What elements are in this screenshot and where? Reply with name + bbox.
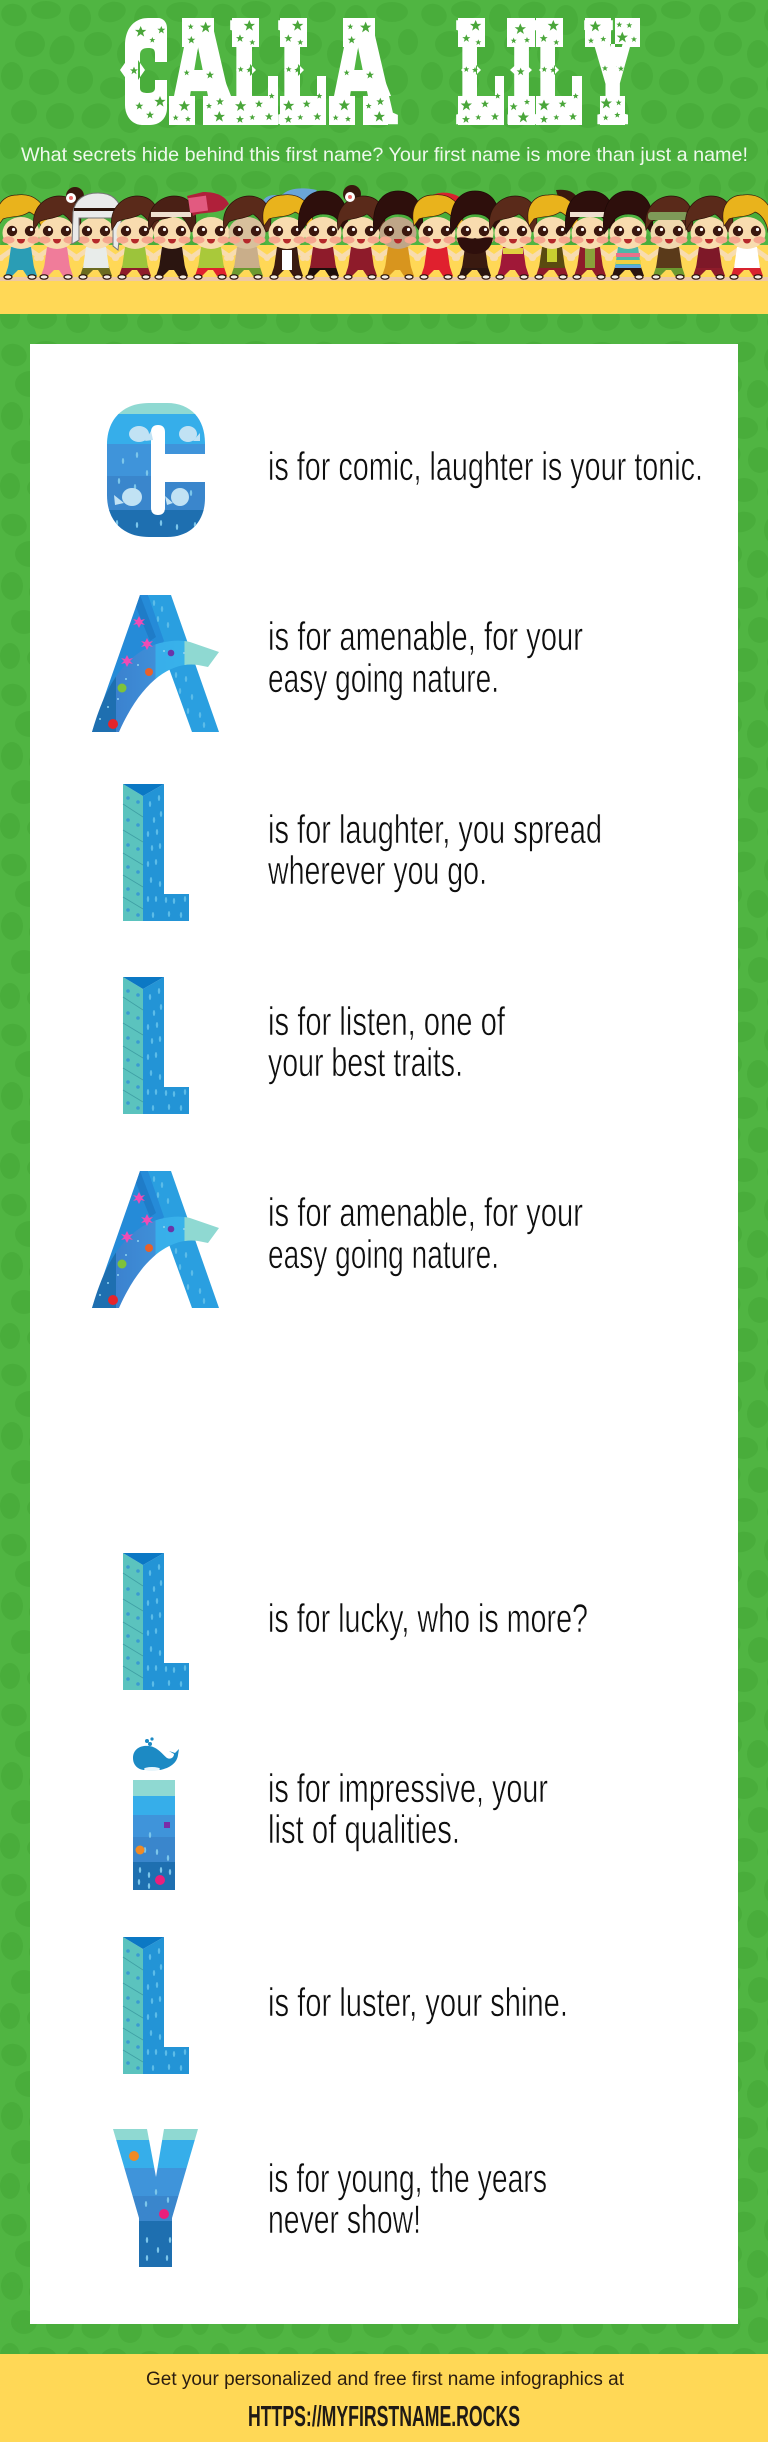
child 6: red fez, red skirt [187, 192, 234, 279]
text: is for amenable: easy going nature. [268, 1233, 499, 1277]
child 20: blond, red and white outfit [723, 195, 768, 279]
title letters: CALLA [120, 0, 397, 156]
title letters: LILY [456, 0, 640, 156]
icon: letter A [92, 595, 219, 732]
icon: letter L [123, 1937, 189, 2074]
child 8: blond, blue cap, apron [263, 188, 317, 279]
text: is for young [268, 2157, 547, 2242]
child 11: dark skin, ochre clothes [373, 191, 423, 279]
child 9: tall dark hair, maroon tunic [298, 191, 348, 279]
footer band [0, 2354, 768, 2442]
footer url: HTTPS://MYFIRSTNAME.ROCKS [248, 2401, 520, 2433]
text: is for listen [268, 1000, 506, 1085]
text: is for amenable: is for amenable, for your [268, 615, 583, 659]
icon: letter I [133, 1780, 175, 1890]
text: is for impressive [268, 1767, 548, 1852]
text: is for amenable [268, 1191, 583, 1277]
row: letter L third [123, 1553, 588, 1690]
icon: letter Y [110, 2129, 200, 2267]
child 2: bun and flower, pink kimono [33, 187, 84, 279]
child 3: white headdress, olive trousers [72, 193, 122, 279]
icon: letter C with whales [107, 403, 205, 537]
text: is for luster: is for luster, your shine. [268, 1981, 568, 2025]
text: is for young: is for young, the years [268, 2157, 547, 2201]
text: is for listen: your best traits. [268, 1041, 463, 1085]
text: is for listen: is for listen, one of [268, 1000, 506, 1044]
row: letter L [123, 784, 602, 921]
text: is for impressive: list of qualities. [268, 1808, 460, 1852]
child 12: blond with red cap, red dress [413, 193, 465, 279]
child 19: maroon outfit [685, 196, 733, 279]
row: letter C [107, 403, 703, 537]
child 17: striped shirt [603, 191, 653, 279]
row: letter I [133, 1737, 548, 1890]
white content panel [30, 344, 738, 2324]
icon: whale above the letter I [133, 1737, 179, 1771]
child 14: spotted maroon skirt [489, 196, 537, 279]
title [120, 0, 640, 156]
child 18: green headband, grass skirt [645, 196, 693, 279]
child 13: dark beard, dark clothes [450, 191, 500, 279]
row: letter A second [92, 1171, 583, 1308]
child 4: brown hair, green top, maroon skirt [111, 196, 159, 279]
text: is for laughter [267, 808, 602, 893]
text: is for amenable: is for amenable, for your [268, 1191, 583, 1235]
child 5: patterned headband, black clothes [148, 196, 196, 279]
footer text: Get your personalized and free first name infographics at [146, 2369, 625, 2390]
row: letter L second [123, 977, 506, 1114]
text: is for amenable [268, 615, 583, 701]
child 15: large blond hair, olive tunic [528, 190, 579, 279]
icon: letter L [123, 1553, 189, 1690]
row: letter L fourth [123, 1937, 568, 2074]
child 16: headband, maroon and green [565, 191, 615, 279]
row: letter A [92, 595, 583, 732]
icon: letter A [92, 1171, 219, 1308]
row: letter Y [110, 2129, 547, 2267]
icon: letter L [123, 784, 189, 921]
subtitle: What secrets hide behind this first name? Your first name is more than just a name! [21, 144, 748, 166]
text: is for lucky: is for lucky, who is more? [268, 1597, 588, 1641]
yellow ribbon band [0, 245, 768, 314]
child 10: bun and flower, maroon clothes [337, 185, 385, 279]
title stars: LILY [461, 20, 637, 123]
row of cartoon children [0, 185, 768, 279]
icon: letter L [123, 977, 189, 1114]
text: is for laughter: wherever you go. [267, 849, 487, 893]
whales on the letter C [114, 426, 200, 506]
text: is for impressive: is for impressive, your [268, 1767, 548, 1811]
title stars: CALLA [130, 20, 385, 123]
text: is for young: never show! [268, 2198, 421, 2242]
child 1: blond, blue overalls [0, 195, 47, 279]
child 7: tan skin, grass skirt [223, 195, 287, 279]
text: is for laughter: is for laughter, you spread [268, 808, 602, 852]
text: is for amenable: easy going nature. [268, 657, 499, 701]
